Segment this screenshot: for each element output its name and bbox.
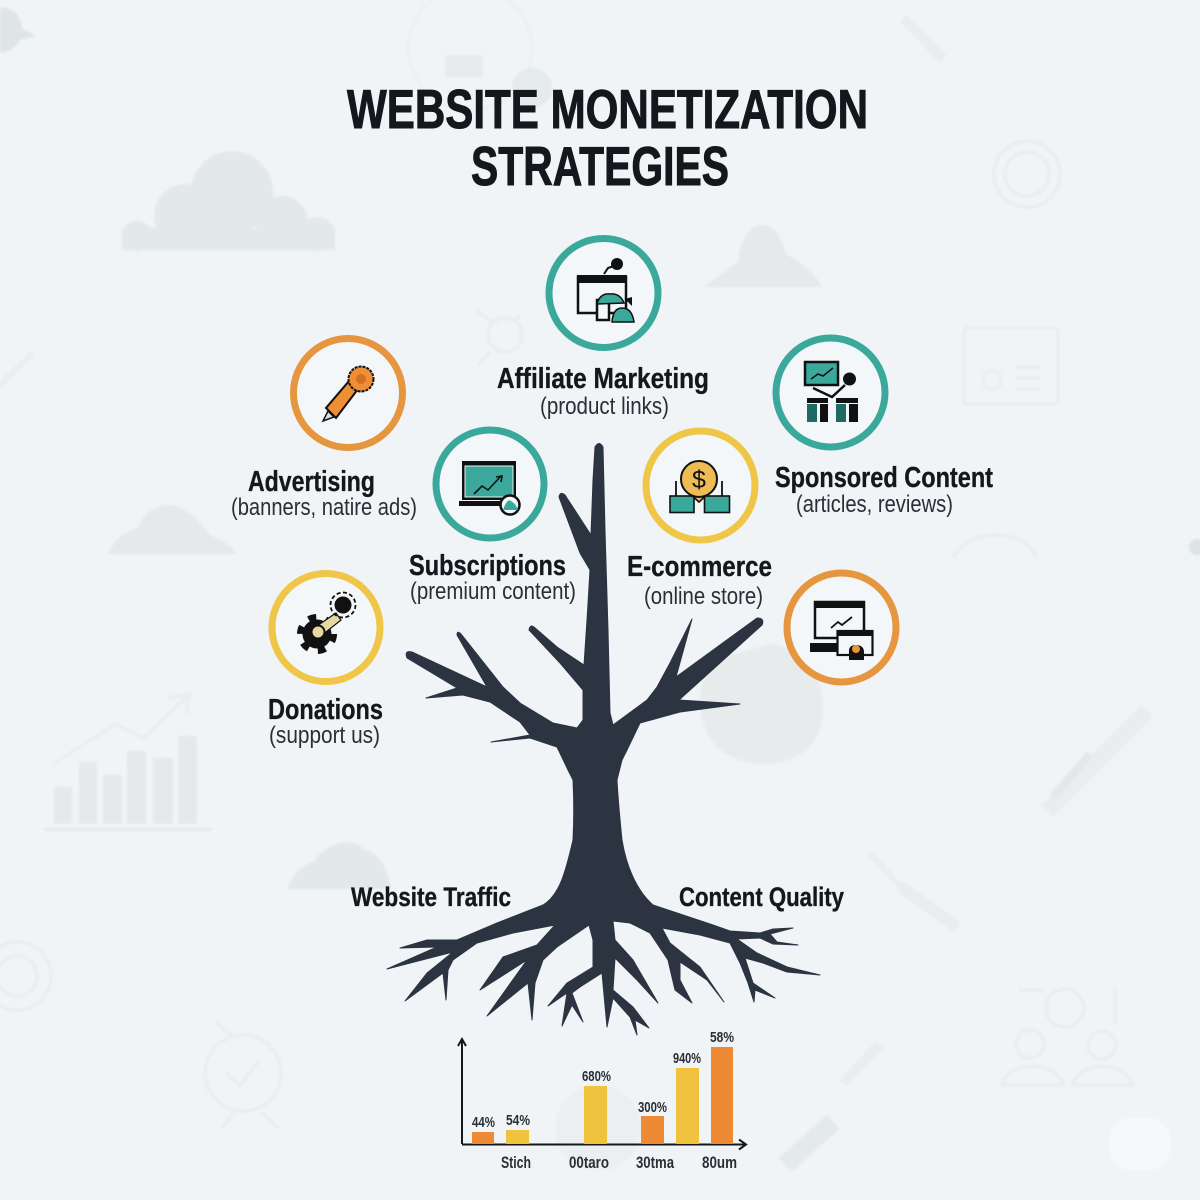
icon ring: affiliate marketing (549, 238, 658, 348)
node: donations (272, 574, 380, 682)
label: donations: Donations (268, 694, 383, 726)
label: advertising (231, 466, 417, 521)
bar chart (458, 1029, 746, 1172)
label: sponsored content (775, 462, 993, 518)
label: sponsored content: (articles, reviews) (796, 491, 953, 518)
label: content quality: Content Quality (679, 882, 844, 912)
node: advertising (294, 338, 402, 448)
icon: orange microphone (323, 366, 374, 421)
label: e-commerce (627, 551, 772, 610)
label: subscriptions (409, 550, 576, 605)
icon ring: advertising (294, 338, 402, 448)
bar value labels: 680% (582, 1068, 611, 1085)
label: e-commerce: E-commerce (627, 551, 772, 583)
category labels: 00taro (569, 1153, 609, 1172)
label: affiliate marketing (497, 363, 709, 420)
label: donations (268, 694, 383, 749)
tree trunk, branches and roots (387, 444, 820, 1035)
icon: gear with handle (300, 592, 356, 651)
title (347, 78, 868, 197)
icon: laptop with rising chart (459, 461, 520, 514)
label: affiliate marketing: (product links) (540, 393, 669, 420)
chart bars (472, 1047, 733, 1144)
node: sponsored content (776, 338, 885, 447)
category labels: 30tma (636, 1153, 674, 1172)
icon ring: donations (272, 574, 380, 682)
label: subscriptions: (premium content) (410, 578, 576, 605)
node: affiliate marketing (549, 238, 658, 348)
ghost bar chart (44, 736, 212, 831)
bar value labels: 940% (673, 1050, 701, 1067)
icon: browser windows with chart and gauge (810, 601, 873, 660)
label: website traffic: Website Traffic (351, 882, 511, 912)
label: advertising: Advertising (248, 466, 375, 498)
icon: dollar coin above two boxes: $ (692, 466, 706, 494)
category labels: Stich (501, 1153, 531, 1172)
icon ring: e-commerce (646, 431, 755, 540)
node: subscriptions (436, 430, 544, 538)
node: website analytics (787, 573, 896, 682)
label: affiliate marketing: Affiliate Marketing (497, 363, 709, 395)
icon ring: website analytics (787, 573, 896, 682)
title: STRATEGIES (471, 135, 729, 197)
label: donations: (support us) (269, 722, 380, 749)
label: e-commerce: (online store) (644, 583, 763, 610)
category labels (501, 1153, 737, 1172)
label: sponsored content: Sponsored Content (775, 462, 993, 494)
category labels: 80um (702, 1153, 737, 1172)
label: advertising: (banners, natire ads) (231, 494, 417, 521)
icon: presenter with chart and desks (805, 362, 858, 422)
icon ring: subscriptions (436, 430, 544, 538)
bar value labels: 54% (506, 1112, 530, 1129)
bar value labels: 300% (638, 1099, 667, 1116)
title: WEBSITE MONETIZATION (347, 78, 868, 140)
bar value labels: 44% (472, 1114, 495, 1131)
bar value labels: 58% (710, 1029, 734, 1046)
label: subscriptions: Subscriptions (409, 550, 566, 582)
icon: browser with cloud and person (577, 258, 634, 322)
chart axes (458, 1039, 746, 1150)
bar value labels (472, 1029, 734, 1131)
node: e-commerce (646, 431, 755, 540)
icon ring: sponsored content (776, 338, 885, 447)
